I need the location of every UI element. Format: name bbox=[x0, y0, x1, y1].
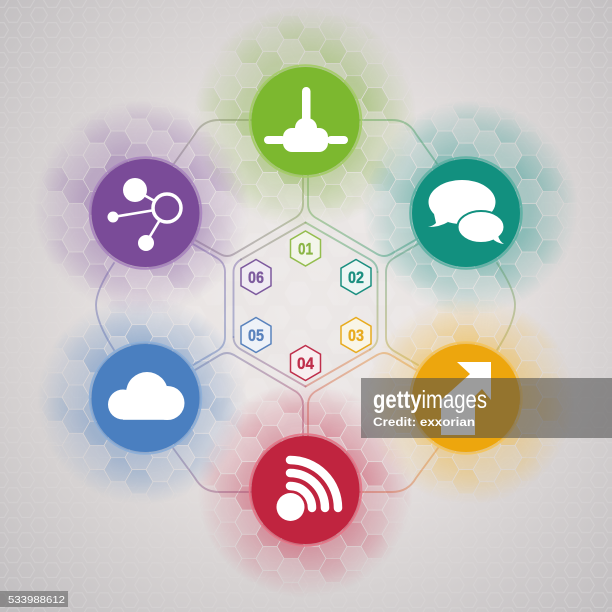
green circle with pipe icon bbox=[250, 65, 362, 177]
badge 01: 01 bbox=[298, 240, 313, 258]
watermark credit: Credit: exxorian bbox=[373, 415, 475, 429]
badge 05: 05 bbox=[248, 326, 264, 345]
badge 01 bbox=[290, 231, 320, 266]
blue circle with cloud icon bbox=[90, 342, 202, 454]
badge 05 bbox=[241, 318, 271, 352]
badge 03: 03 bbox=[348, 326, 364, 345]
watermark banner bbox=[361, 378, 612, 438]
connector network bbox=[96, 120, 515, 492]
badge 06: 06 bbox=[248, 268, 264, 287]
badge 06 bbox=[241, 260, 271, 294]
badge 03 bbox=[341, 318, 371, 352]
icon: pipe junction bbox=[264, 87, 348, 152]
orange circle with arrow icon bbox=[410, 342, 522, 454]
image id tag bbox=[0, 591, 68, 607]
image id tag: 533988612 bbox=[8, 594, 65, 606]
icon: cloud bbox=[108, 372, 184, 420]
badge 02 bbox=[341, 260, 371, 294]
watermark logo: gettyimages bbox=[373, 386, 487, 414]
icon: speech bubbles bbox=[428, 180, 504, 244]
red circle with signal icon bbox=[250, 434, 362, 546]
badge 04: 04 bbox=[297, 354, 314, 373]
badge 04 bbox=[290, 346, 320, 380]
badge 02: 02 bbox=[348, 268, 364, 287]
number badges bbox=[241, 231, 371, 380]
teal circle with speech bubbles icon bbox=[410, 157, 522, 269]
icon: share nodes bbox=[108, 178, 181, 251]
icon: rss signal bbox=[276, 460, 338, 521]
icon: share arrow bbox=[441, 362, 491, 435]
purple circle with share nodes icon bbox=[90, 157, 202, 269]
